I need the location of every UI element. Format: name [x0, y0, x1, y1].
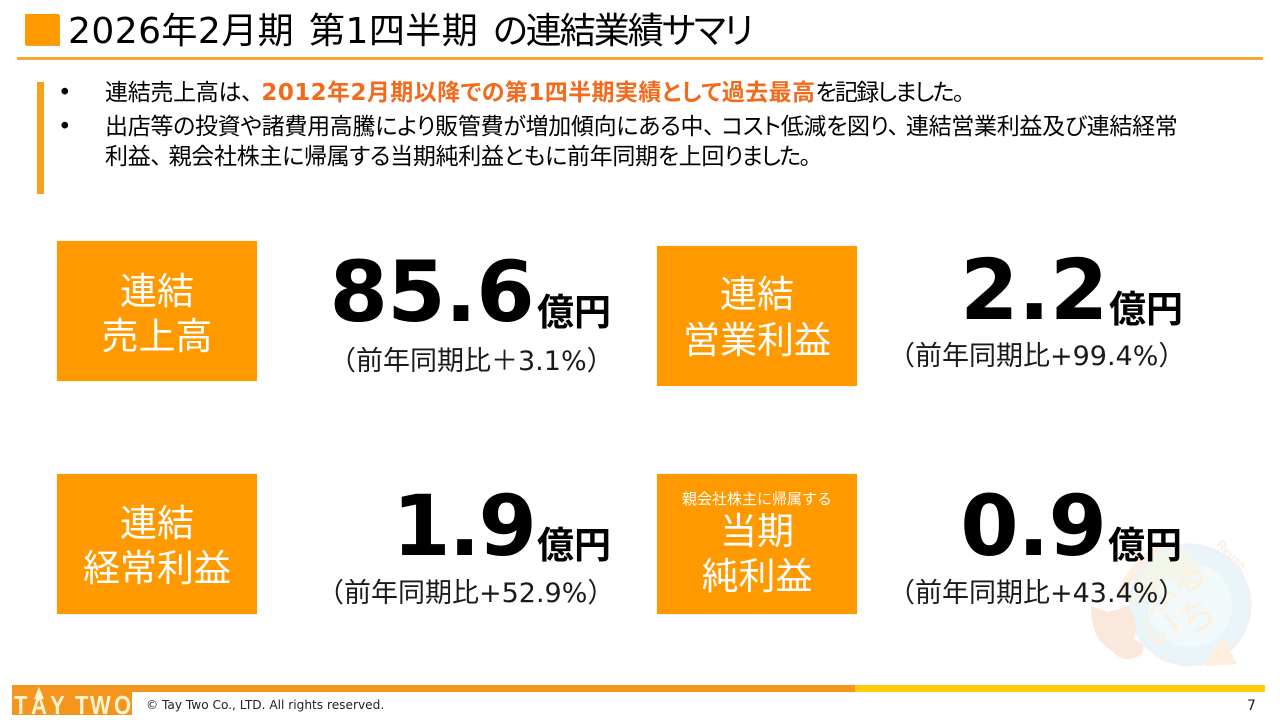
- title marker square: [25, 14, 59, 45]
- KPI label: 連結経常利益: [57, 474, 257, 614]
- bullet 1: •: [58, 80, 71, 106]
- title: 2026年2月期 第1四半期 の連結業績サマリ: [68, 11, 751, 52]
- KPI value: 2.2億円: 億円: [1109, 288, 1183, 331]
- KPI value: 2.2億円: 2.2: [960, 241, 1108, 339]
- bullet 1: 連結売上高は、 2012年2月期以降での第1四半期実績として過去最高を記録しました。: [105, 80, 963, 106]
- KPI value: 1.9億円: [392, 477, 611, 575]
- KPI label: 親会社株主に帰属する当期純利益: [657, 474, 857, 614]
- footer bar orange: [12, 685, 855, 692]
- KPI label: 連結営業利益: 連結: [720, 273, 794, 316]
- bullet 2: 出店等の投資や諸費用高騰により販管費が増加傾向にある中、 コスト低減を図り、 連結営業利益及び連結経常: [105, 114, 1178, 140]
- KPI label: 連結営業利益: [657, 246, 857, 386]
- KPI value: 85.6億円: 85.6: [330, 243, 534, 341]
- page number: 7: [1247, 698, 1256, 714]
- KPI value: 0.9億円: [960, 477, 1182, 575]
- KPI label: 連結営業利益: 営業利益: [683, 319, 831, 362]
- KPI value: 1.9億円: 億円: [537, 524, 611, 567]
- KPI label: 連結売上高: 連結: [120, 270, 194, 313]
- bullet 2: •: [58, 114, 71, 140]
- KPI value: 2.2億円: [960, 241, 1183, 339]
- title underline: [17, 57, 1263, 60]
- bullet 2: 利益、 親会社株主に帰属する当期純利益ともに前年同期を上回りました。: [105, 144, 809, 170]
- watermark mascot globe: いち: [1133, 581, 1223, 658]
- KPI comparison: operating profit: （前年同期比+99.4%）: [888, 341, 1185, 372]
- KPI comparison: net profit: （前年同期比+43.4%）: [888, 578, 1185, 609]
- footer bar yellow: [855, 685, 1265, 692]
- KPI label: 親会社株主に帰属する当期純利益: 純利益: [702, 555, 812, 598]
- KPI label: 連結経常利益: 連結: [120, 502, 194, 545]
- watermark mascot globe: [1091, 540, 1252, 666]
- summary text block: [58, 80, 1178, 170]
- KPI label: 連結売上高: [57, 241, 257, 381]
- summary side bar: [37, 82, 44, 194]
- KPI label: 親会社株主に帰属する当期純利益: 当期: [720, 510, 794, 553]
- KPI label: 親会社株主に帰属する当期純利益: 親会社株主に帰属する: [682, 490, 832, 508]
- KPI label: 連結売上高: 売上高: [102, 315, 212, 358]
- KPI value: 1.9億円: 1.9: [392, 477, 535, 575]
- KPI label: 連結経常利益: 経常利益: [83, 547, 231, 590]
- copyright: © Tay Two Co., LTD. All rights reserved.: [146, 698, 384, 712]
- KPI value: 85.6億円: 億円: [537, 291, 611, 334]
- KPI value: 0.9億円: 億円: [1108, 524, 1182, 567]
- KPI value: 0.9億円: 0.9: [960, 477, 1106, 575]
- watermark mascot globe: ふる: [1128, 543, 1216, 626]
- KPI comparison: sales: （前年同期比＋3.1%）: [329, 346, 614, 377]
- bullet 2: [58, 114, 1178, 170]
- KPI comparison: ordinary profit: （前年同期比+52.9%）: [317, 578, 614, 609]
